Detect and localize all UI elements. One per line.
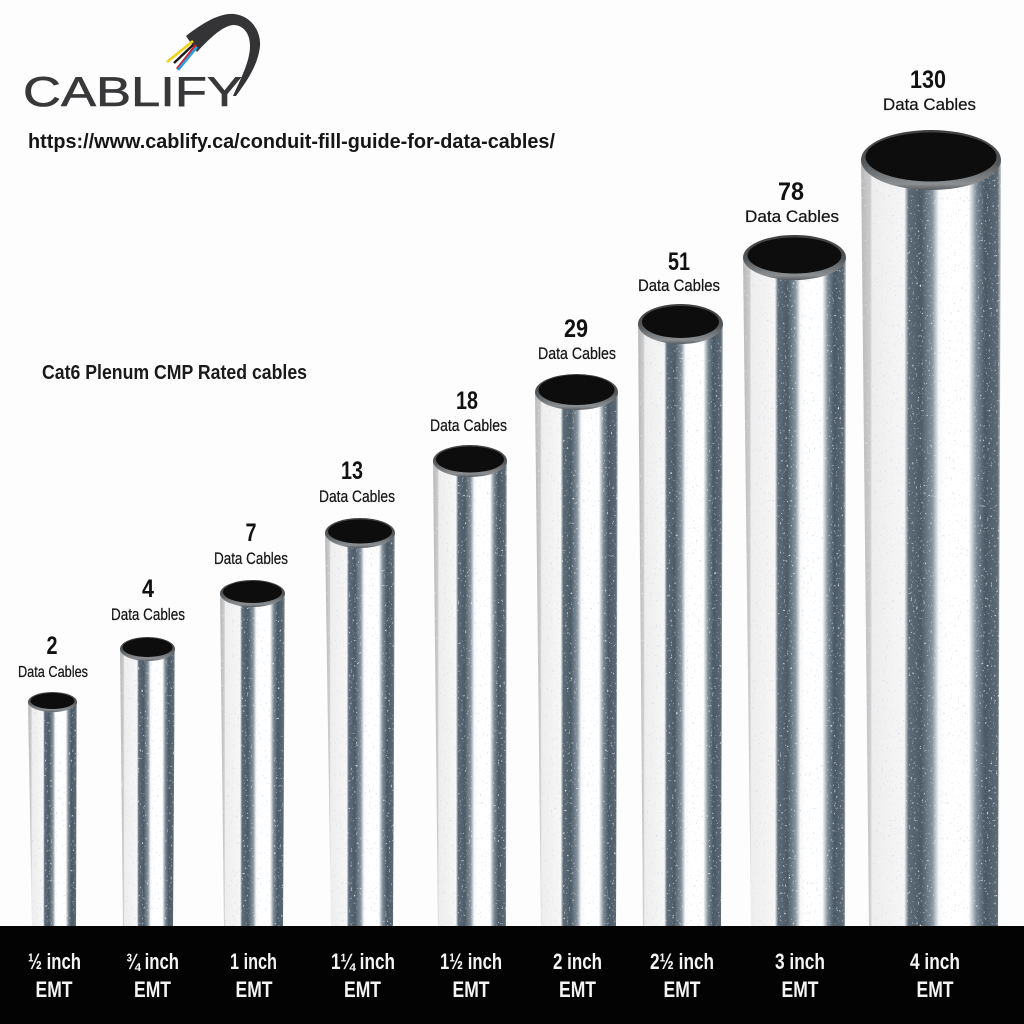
size label: 1 1/2 inch: EMT <box>452 977 490 1002</box>
count label: 18 cables <box>430 387 507 435</box>
count label: 13 cables: 13 <box>341 457 363 485</box>
count label: 78 cables <box>745 178 839 226</box>
count label: 13 cables: Data Cables <box>319 487 395 506</box>
icon: cable <box>167 14 260 96</box>
count label: 51 cables: 51 <box>668 248 690 276</box>
footer band <box>0 926 1024 1024</box>
size label: 3 inch: EMT <box>782 977 819 1002</box>
count label: 29 cables: Data Cables <box>538 344 616 363</box>
count label: 2 cables: 2 <box>46 632 58 660</box>
conduit: 2 1/2 inch <box>638 304 723 926</box>
cable type note: Cat6 Plenum CMP Rated cables <box>42 362 307 384</box>
count label: 7 cables: 7 <box>246 519 256 547</box>
conduit: 2 inch <box>535 374 618 926</box>
size label: 3/4 inch <box>126 949 179 1002</box>
count label: 130 cables <box>883 66 976 114</box>
size label: 2 inch: EMT <box>559 977 596 1002</box>
size label: 4 inch: EMT <box>916 977 954 1002</box>
count label: 4 cables: 4 <box>142 575 154 603</box>
size label: 2 inch <box>553 949 602 1002</box>
size label: 3/4 inch: EMT <box>134 977 171 1002</box>
count label: 18 cables: Data Cables <box>430 416 507 435</box>
count label: 7 cables: Data Cables <box>214 549 288 568</box>
size label: 3 inch: 3 inch <box>775 949 825 974</box>
count label: 4 cables <box>111 575 185 624</box>
conduit: 4 inch <box>861 130 1001 926</box>
size label: 1 1/2 inch: 1½ inch <box>440 949 502 974</box>
size label: 2 1/2 inch <box>650 949 714 1002</box>
count label: 4 cables: Data Cables <box>111 605 185 624</box>
count label: 2 cables <box>18 632 88 681</box>
conduit: 1 inch <box>220 580 285 926</box>
size label: 1 1/4 inch: 1¼ inch <box>331 949 395 974</box>
size label: 1 1/4 inch: EMT <box>344 977 381 1002</box>
size label: 3/4 inch: ¾ inch <box>126 949 179 974</box>
size label: 1 1/2 inch <box>440 949 502 1002</box>
count label: 29 cables: 29 <box>564 315 588 343</box>
size label: 1 inch: EMT <box>236 977 273 1002</box>
conduit: 3 inch <box>743 235 846 926</box>
count label: 51 cables <box>638 248 720 295</box>
size label: 3 inch <box>775 949 825 1002</box>
conduit: 3/4 inch <box>120 637 175 926</box>
size label: 4 inch: 4 inch <box>910 949 960 974</box>
size label: 4 inch <box>910 949 960 1002</box>
count label: 130 cables: 130 <box>910 66 946 94</box>
count label: 51 cables: Data Cables <box>638 276 720 295</box>
size label: 2 1/2 inch: EMT <box>664 977 701 1002</box>
size label: 1 1/4 inch <box>331 949 395 1002</box>
conduit: 1 1/4 inch <box>325 518 395 926</box>
count label: 78 cables: 78 <box>778 178 804 206</box>
count label: 29 cables <box>538 315 616 363</box>
size label: 1/2 inch: EMT <box>36 977 73 1002</box>
conduit: 1 1/2 inch <box>433 445 507 926</box>
source URL: https://www.cablify.ca/conduit-fill-guide-for-data-cables/ <box>28 131 555 153</box>
logo wordmark: CABLIFY <box>23 68 242 115</box>
size label: 2 1/2 inch: 2½ inch <box>650 949 714 974</box>
count label: 130 cables: Data Cables <box>883 95 976 114</box>
count label: 78 cables: Data Cables <box>745 207 839 226</box>
conduit: 1/2 inch <box>28 692 77 926</box>
count label: 7 cables <box>214 519 288 568</box>
size label: 1/2 inch <box>28 949 81 1002</box>
size label: 1/2 inch: ½ inch <box>28 949 81 974</box>
count label: 2 cables: Data Cables <box>18 664 88 681</box>
size label: 1 inch <box>230 949 277 1002</box>
count label: 18 cables: 18 <box>456 387 478 415</box>
size label: 2 inch: 2 inch <box>553 949 602 974</box>
logo: Cablify <box>23 14 260 115</box>
size label: 1 inch: 1 inch <box>230 949 277 974</box>
count label: 13 cables <box>319 457 395 506</box>
